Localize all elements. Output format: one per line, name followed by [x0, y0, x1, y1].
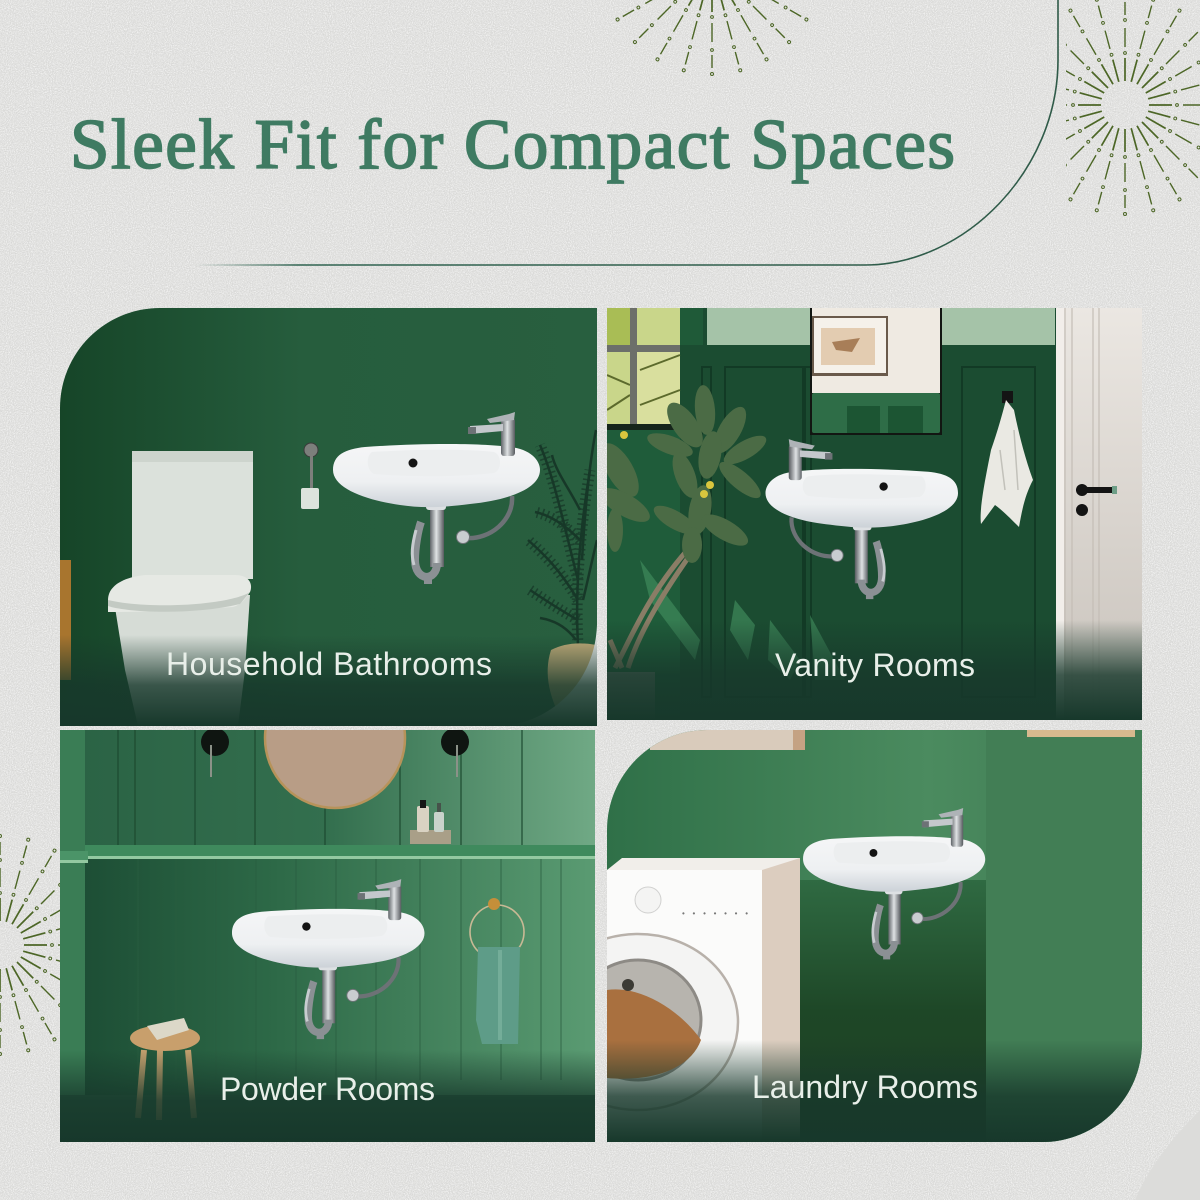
label: Powder Rooms — [220, 1071, 435, 1107]
bottom-right cut corner — [540, 626, 597, 716]
wall mouldings — [701, 366, 1036, 656]
sunburst: top centre — [602, 0, 822, 76]
round mirror — [265, 668, 405, 808]
sunburst: left edge — [0, 834, 111, 1056]
label: Vanity Rooms — [775, 647, 975, 683]
panel: household bathrooms — [60, 308, 597, 726]
sink — [232, 879, 425, 1039]
bottom shade — [607, 620, 1142, 720]
shadow area below sink — [800, 880, 986, 1142]
washing machine — [538, 858, 800, 1142]
stool with book — [130, 1018, 200, 1120]
wall frame — [1027, 730, 1135, 737]
toilet brush holder — [301, 443, 319, 509]
toilet — [108, 451, 253, 726]
wall sconces — [201, 728, 469, 777]
label: Laundry Rooms — [752, 1069, 978, 1105]
mirror — [810, 308, 942, 435]
bottom shade — [60, 635, 597, 726]
label: Household Bathrooms — [166, 646, 492, 682]
curved frame line — [195, 0, 1058, 265]
towel — [981, 391, 1033, 527]
sink — [765, 439, 958, 599]
bottom shade — [60, 1050, 595, 1142]
pot — [607, 672, 655, 696]
door — [1056, 308, 1142, 720]
bottles and tray — [410, 800, 451, 844]
dappled light — [640, 560, 845, 680]
wooden item — [60, 560, 71, 680]
panel: vanity rooms — [594, 308, 1142, 720]
potted palm — [528, 430, 597, 645]
sink — [803, 808, 985, 959]
window — [607, 308, 680, 430]
panel: laundry rooms — [538, 730, 1142, 1142]
plant — [594, 384, 770, 668]
wall shelf — [650, 730, 805, 750]
planter — [548, 643, 594, 706]
bottom shade — [607, 1040, 1142, 1142]
washing machine: • • • • • • • — [682, 909, 748, 918]
floor — [60, 1095, 595, 1142]
title: Sleek Fit for Compact Spaces — [70, 106, 955, 184]
lower planks — [296, 859, 562, 1080]
sunburst: top right — [1066, 0, 1200, 216]
sage upper wall — [707, 308, 1055, 345]
upper planks — [118, 730, 522, 845]
panel: powder rooms — [60, 730, 595, 1142]
towel ring and towel — [470, 898, 524, 1044]
sink — [333, 412, 540, 584]
ledge — [60, 845, 595, 863]
